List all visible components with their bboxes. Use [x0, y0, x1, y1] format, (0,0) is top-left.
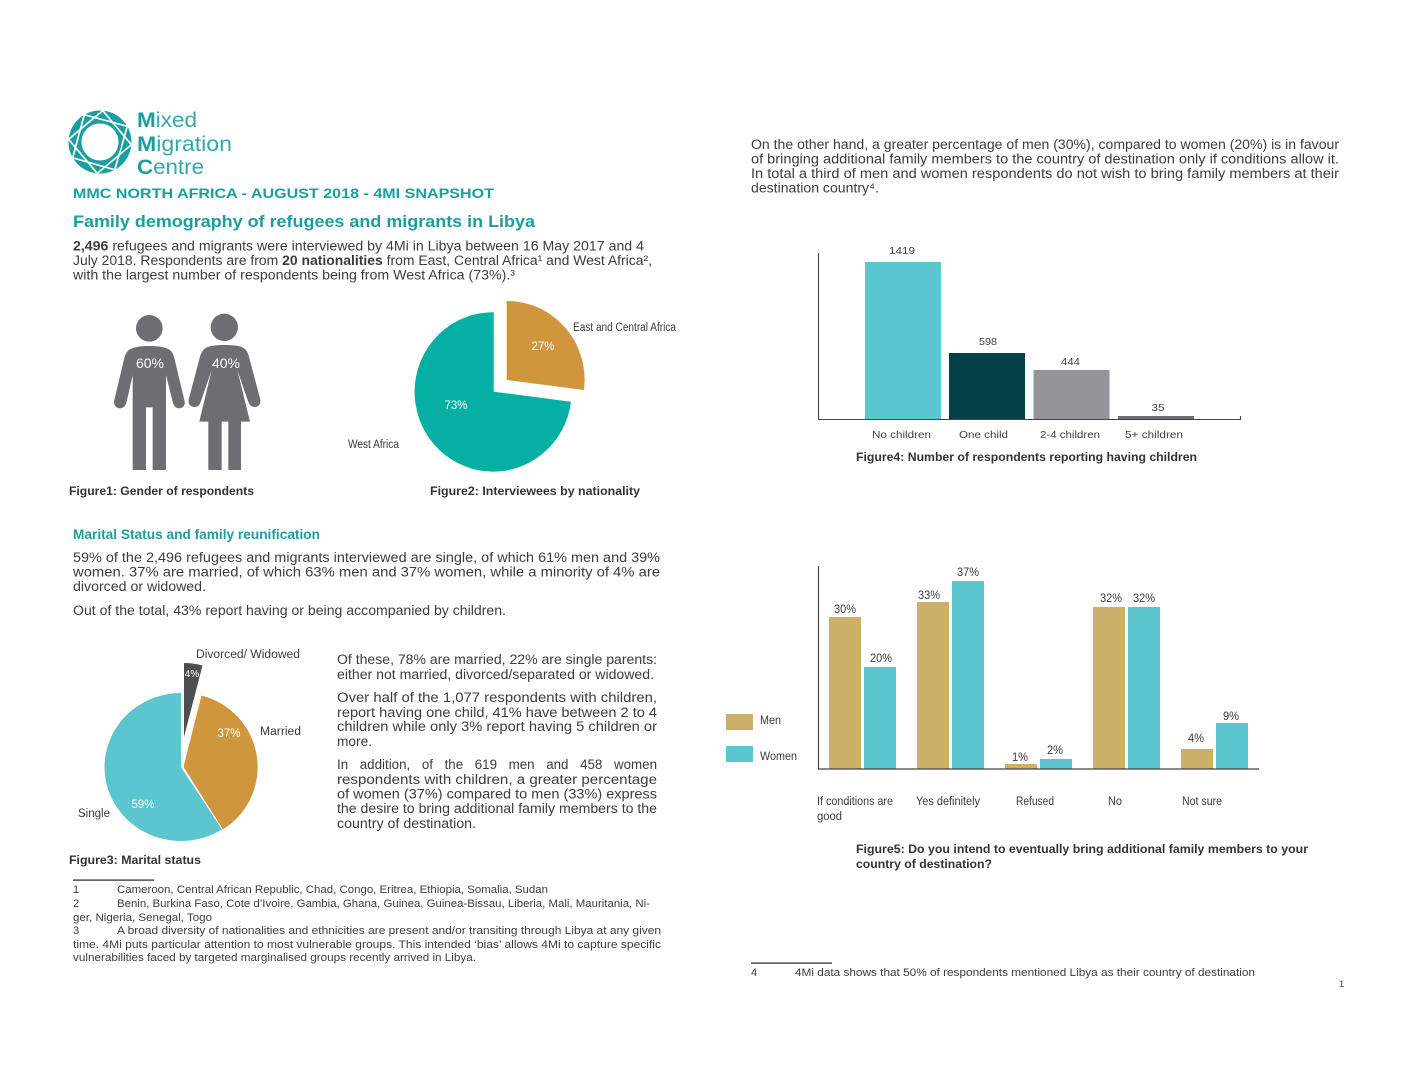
bar chart: intention to bring family members: 37% — [957, 567, 979, 579]
footnotes: left column: A broad diversity of nationalities and ethnicities are present and/or transiting through Libya at any given — [117, 925, 661, 937]
pie chart: marital status: Married — [260, 726, 301, 738]
text block: other hand paragraph: destination country⁴. — [751, 180, 879, 196]
bar chart: intention to bring family members: Yes definitely — [916, 796, 980, 808]
text block: children and parents: of women (37%) compared to men (33%) express — [337, 786, 657, 802]
icon: man and woman gender figures — [114, 314, 260, 470]
pie chart: interviewees by nationality: 27% — [531, 341, 555, 353]
text block: children and parents: Over half of the 1,077 respondents with children, — [337, 690, 657, 705]
text block: introduction: 2,496 refugees and migrants were interviewed by 4Mi in Libya between 16 May 2017 and 4 — [73, 238, 645, 254]
caption: figure 1: Figure1: Gender of respondents — [69, 484, 254, 498]
footnotes: left column — [73, 880, 662, 964]
footnotes: left column: Cameroon, Central African Republic, Chad, Congo, Eritrea, Ethiopia, Somalia, Sudan — [117, 884, 548, 896]
legend: men and women: Women — [760, 751, 797, 763]
footnotes: left column: ger, Nigeria, Senegal, Togo — [73, 912, 212, 924]
bar chart: intention to bring family members: If conditions are — [817, 796, 893, 808]
text block: children and parents: either not married, divorced/separated or widowed. — [337, 667, 654, 682]
pie chart: interviewees by nationality — [348, 301, 677, 472]
footnote: right column — [751, 962, 1255, 979]
text block: other hand paragraph — [751, 137, 1340, 196]
text block: introduction: with the largest number of respondents being from West Africa (73%).³ — [72, 268, 516, 282]
caption: figure 3: Figure3: Marital status — [69, 853, 201, 867]
legend: men and women: Men — [760, 715, 781, 727]
page number: 1 — [1339, 979, 1344, 990]
text block: children and parents: the desire to bring additional family members to the — [337, 801, 657, 816]
text block: children and parents: In addition, of the 619 men and 458 women — [337, 757, 657, 772]
text block: marital status: 59% of the 2,496 refugees and migrants interviewed are single, of which 61% men and 39% — [73, 550, 660, 565]
snapshot heading: MMC NORTH AFRICA - AUGUST 2018 - 4MI SNAPSHOT — [73, 185, 495, 201]
footnotes: left column: time. 4Mi puts particular attention to most vulnerable groups. This intended ‘bias’ allows 4Mi to capture specific — [73, 939, 662, 951]
bar chart: intention to bring family members — [817, 566, 1259, 823]
footnote: right column: 4Mi data shows that 50% of respondents mentioned Libya as their country of destination — [795, 967, 1255, 979]
bar chart: number of respondents having children — [818, 245, 1240, 441]
footnotes: left column: 3 — [73, 925, 79, 937]
footnotes: left column: Benin, Burkina Faso, Cote d’Ivoire, Gambia, Ghana, Guinea, Guinea-Bissau, Liberia, Mali, Mauritania, Ni- — [117, 898, 650, 910]
footnote: right column: 4 — [751, 967, 757, 979]
caption: figure 2: Figure2: Interviewees by nationality — [430, 484, 640, 498]
bar chart: intention to bring family members: 2% — [1047, 745, 1063, 757]
logo: Mixed Migration Centre: Migration — [137, 133, 232, 156]
bar chart: intention to bring family members: 1% — [1012, 752, 1028, 764]
logo: Mixed Migration Centre — [68, 109, 232, 179]
text block: other hand paragraph: In total a third of men and women respondents do not wish to bring family members at their — [751, 166, 1340, 181]
bar chart: intention to bring family members: Not sure — [1182, 796, 1222, 808]
logo: Mixed Migration Centre: Centre — [137, 156, 204, 179]
bar chart: number of respondents having children: One child — [959, 429, 1008, 441]
bar chart: intention to bring family members: 4% — [1188, 733, 1204, 745]
text block: children and parents: children while only 3% report having 5 children or — [337, 719, 658, 734]
footnotes: left column: vulnerabilities faced by targeted marginalised groups recently arrived in Libya. — [73, 952, 476, 964]
pie chart: marital status: 4% — [185, 669, 199, 680]
caption: figure 4: Figure4: Number of respondents reporting having children — [856, 450, 1197, 464]
bar chart: intention to bring family members: 32% — [1100, 593, 1122, 605]
pie chart: interviewees by nationality: West Africa — [348, 439, 400, 451]
footnotes: left column: 1 — [73, 884, 79, 896]
pie chart: interviewees by nationality: East and Central Africa — [573, 322, 677, 334]
bar chart: intention to bring family members: 9% — [1223, 711, 1239, 723]
title: Family demography of refugees and migrants in Libya — [73, 212, 536, 231]
text block: children and parents: more. — [337, 734, 372, 749]
pie chart: marital status: Divorced/ Widowed — [196, 649, 300, 661]
caption: figure 5: country of destination? — [856, 857, 992, 871]
text block: children and parents — [337, 652, 658, 831]
text block: other hand paragraph: On the other hand, a greater percentage of men (30%), compared to women (20%) is in favour — [751, 137, 1340, 152]
bar chart: number of respondents having children: 5+ children — [1125, 429, 1183, 441]
pie chart: marital status: Single — [78, 808, 110, 820]
text block: introduction — [72, 238, 652, 282]
text block: marital status: divorced or widowed. — [73, 579, 206, 594]
caption: figure 5: Figure5: Do you intend to eventually bring additional family members to your — [856, 842, 1308, 856]
text block: marital status — [72, 550, 660, 618]
text block: marital status: Out of the total, 43% report having or being accompanied by children. — [73, 603, 506, 618]
text block: children and parents: report having one child, 41% have between 2 to 4 — [337, 705, 658, 720]
text block: marital status: women. 37% are married, of which 63% men and 37% women, while a minority of 4% are — [72, 564, 660, 580]
bar chart: number of respondents having children: 444 — [1061, 356, 1080, 368]
bar chart: number of respondents having children: 2-4 children — [1040, 429, 1100, 441]
pie chart: marital status: 37% — [217, 728, 241, 740]
legend: men and women — [726, 714, 797, 763]
bar chart: intention to bring family members: 20% — [870, 653, 892, 665]
pie chart: marital status: 59% — [131, 799, 155, 811]
bar chart: intention to bring family members: Refused — [1016, 796, 1054, 808]
bar chart: number of respondents having children: No children — [872, 429, 931, 441]
section heading: marital status: Marital Status and family reunification — [73, 527, 320, 542]
bar chart: intention to bring family members: No — [1108, 796, 1122, 808]
bar chart: intention to bring family members: 33% — [918, 590, 940, 602]
icon: man and woman gender figures: 60% — [136, 355, 164, 371]
logo: Mixed Migration Centre: Mixed — [137, 109, 197, 132]
text block: children and parents: country of destination. — [337, 816, 476, 831]
text block: other hand paragraph: of bringing additional family members to the country of destination only if conditions allow it. — [751, 152, 1339, 166]
bar chart: number of respondents having children: 35 — [1152, 402, 1165, 414]
bar chart: intention to bring family members: 32% — [1133, 593, 1155, 605]
icon: man and woman gender figures: 40% — [212, 355, 240, 371]
text block: introduction: July 2018. Respondents are from 20 nationalities from East, Central Africa¹ and West Africa², — [73, 253, 652, 268]
footnotes: left column: 2 — [73, 898, 79, 910]
text block: children and parents: respondents with children, a greater percentage — [337, 772, 657, 787]
pie chart: interviewees by nationality: 73% — [444, 400, 468, 412]
bar chart: intention to bring family members: good — [817, 811, 842, 823]
pie chart: marital status — [78, 649, 301, 841]
text block: children and parents: Of these, 78% are married, 22% are single parents: — [337, 652, 657, 667]
caption: figure 5 — [856, 842, 1308, 871]
bar chart: number of respondents having children: 1419 — [889, 245, 915, 257]
bar chart: number of respondents having children: 598 — [979, 336, 997, 348]
bar chart: intention to bring family members: 30% — [834, 604, 856, 616]
